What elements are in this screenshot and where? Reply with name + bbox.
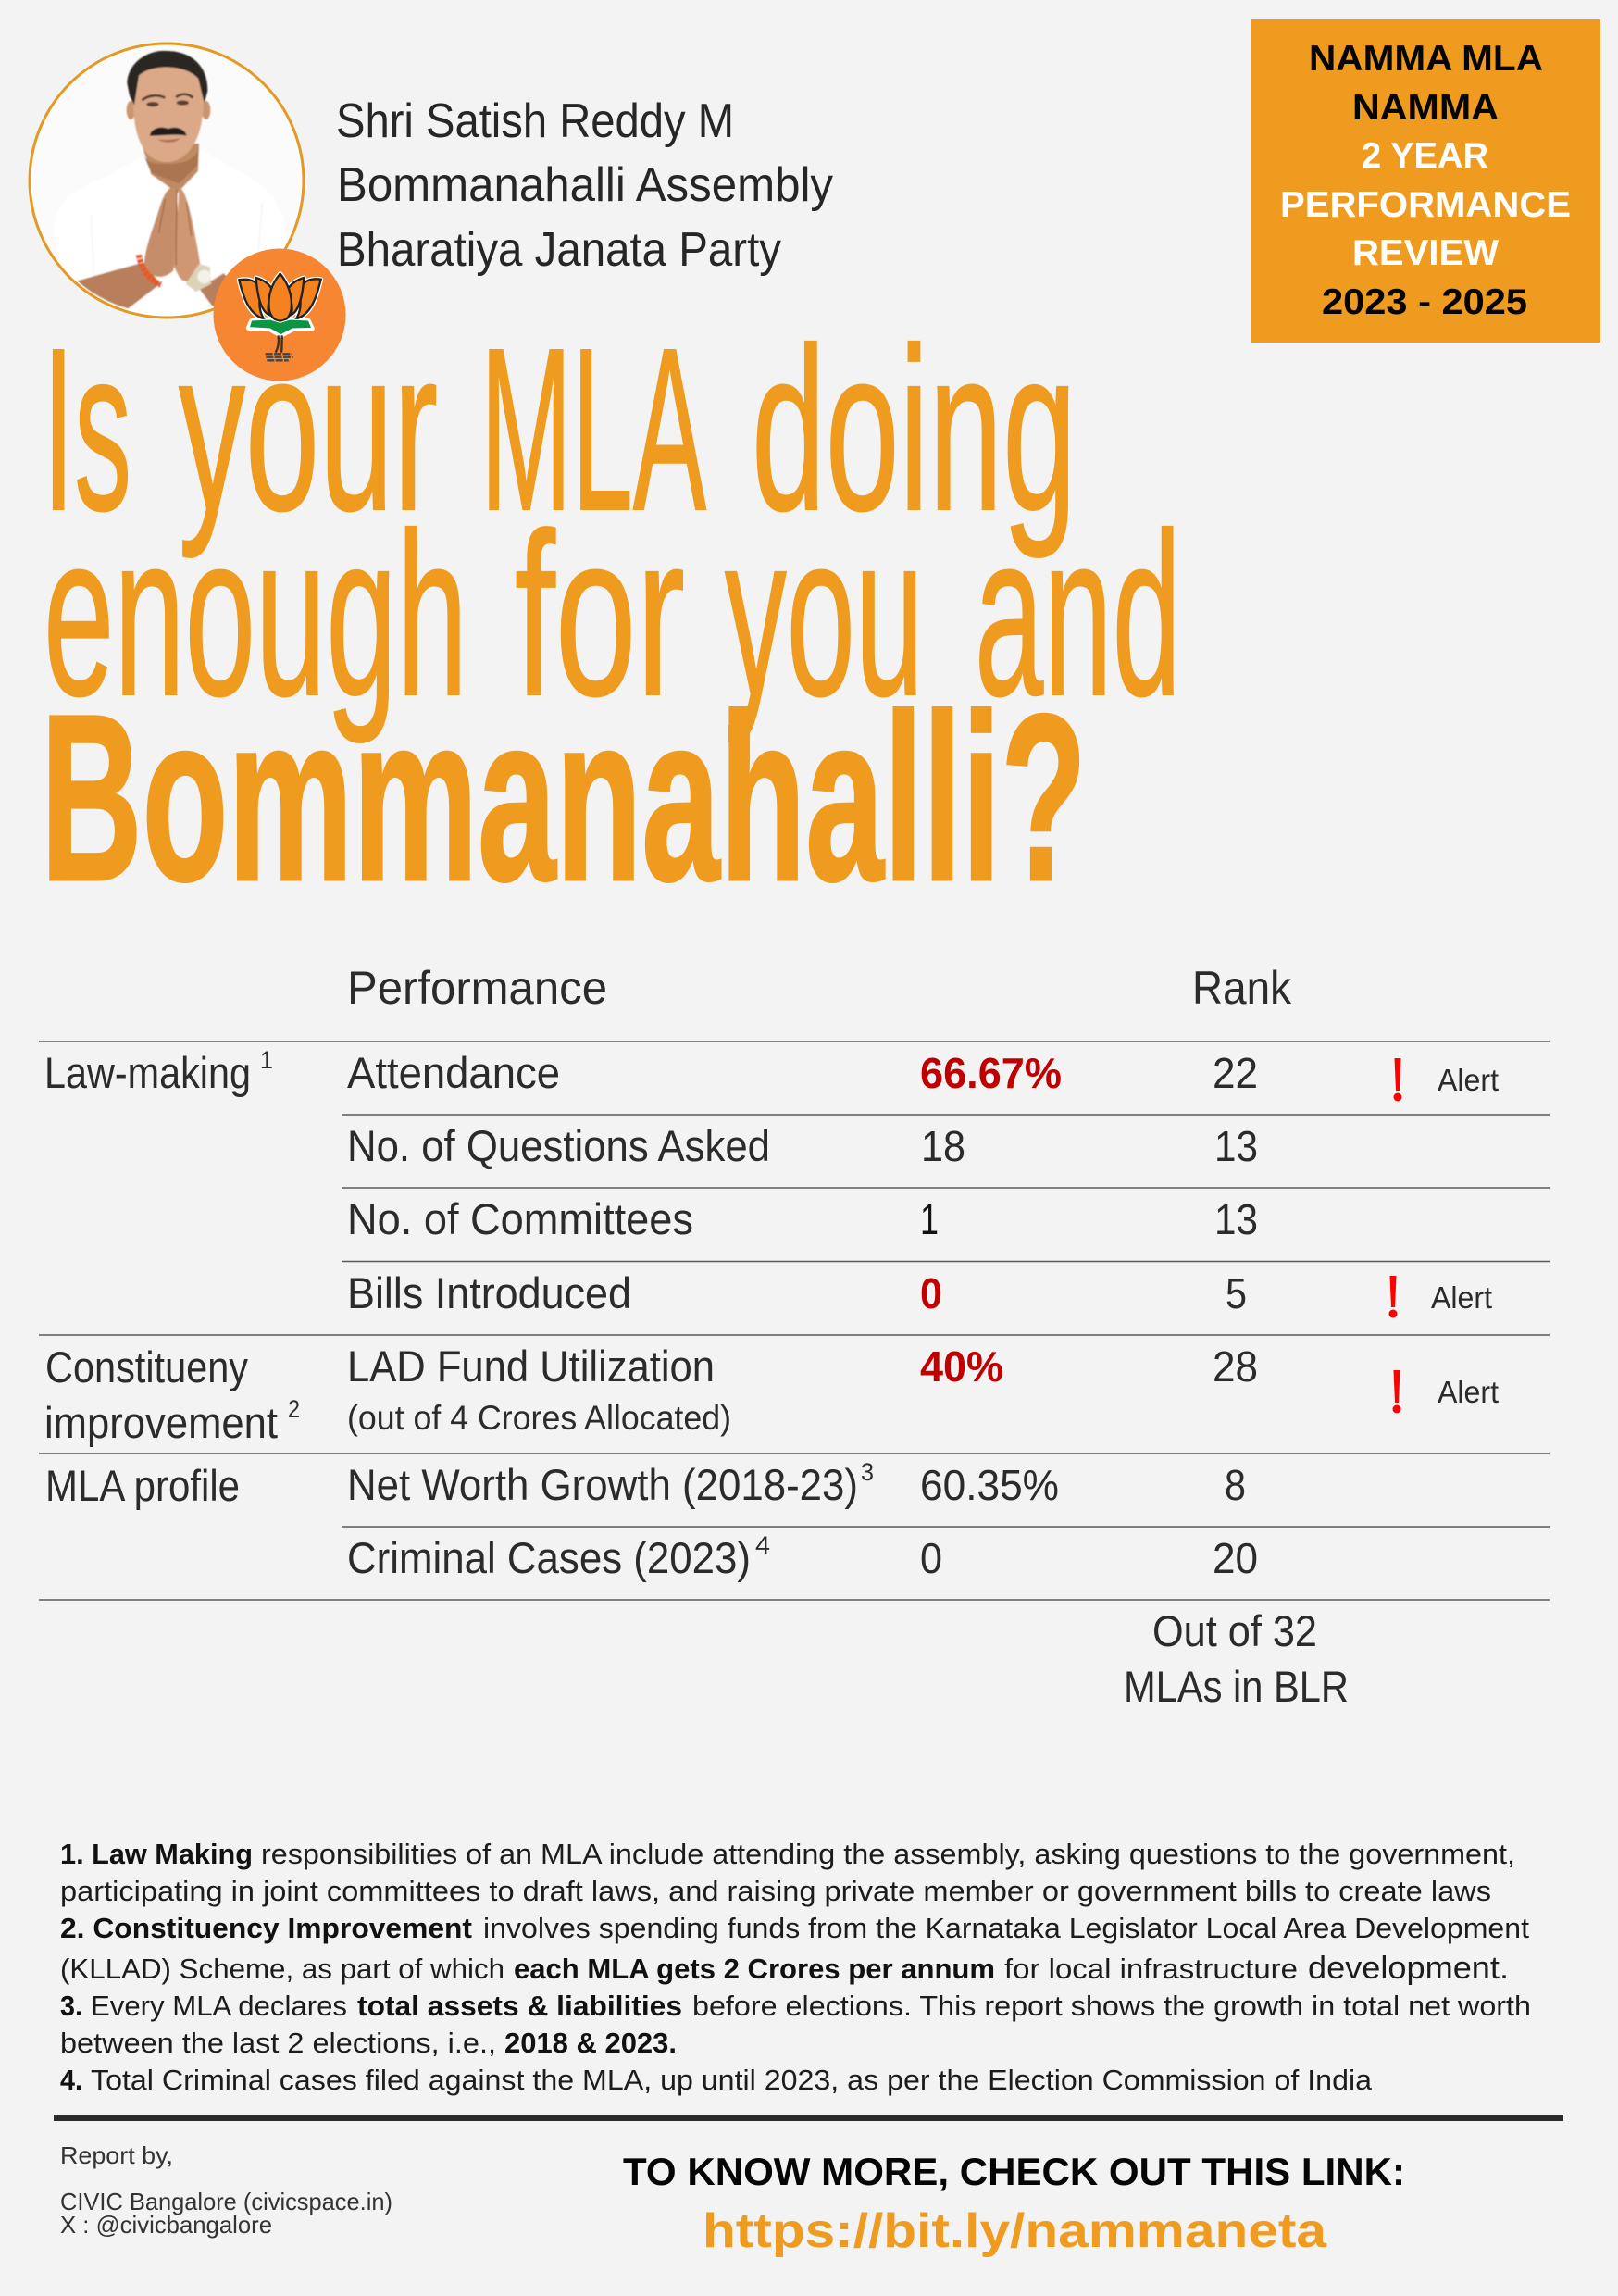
note 2: development.: [1308, 1951, 1509, 1986]
note 2: for local infrastructure: [1004, 1953, 1298, 1985]
row: committees: 13: [1214, 1195, 1258, 1243]
review badge: 2 YEAR: [1362, 136, 1488, 176]
performance table: [39, 962, 1550, 1711]
headline: for: [515, 485, 685, 743]
row: LAD fund: LAD Fund Utilization: [347, 1341, 715, 1391]
row: questions asked: No. of Questions Asked: [347, 1121, 770, 1170]
row: attendance: 22: [1213, 1049, 1258, 1097]
row: questions asked: 13: [1214, 1122, 1258, 1170]
headline: your: [179, 300, 438, 558]
row: net worth growth: Net Worth Growth (2018-23): [347, 1460, 858, 1509]
row: bills introduced: 0: [920, 1269, 942, 1317]
row: criminal cases: 0: [920, 1534, 942, 1582]
row: LAD fund: 40%: [920, 1342, 1003, 1391]
note 2: each MLA gets 2 Crores per annum: [514, 1953, 995, 1985]
row: committees: 1: [920, 1195, 939, 1243]
review badge: 2023 - 2025: [1322, 282, 1527, 322]
note 1: [60, 1838, 1515, 1907]
review badge: NAMMA MLA: [1309, 39, 1543, 79]
note 3: total assets & liabilities: [357, 1990, 682, 2022]
report credit: [60, 2141, 392, 2239]
rank footnote: [1124, 1606, 1349, 1711]
row: bills introduced: Bills Introduced: [347, 1268, 631, 1317]
note 2: 2. Constituency Improvement: [60, 1912, 472, 1944]
rank footnote: Out of 32: [1152, 1606, 1317, 1655]
row: committees: [347, 1194, 1258, 1243]
review badge: REVIEW: [1352, 233, 1499, 273]
headline: Is: [43, 300, 131, 558]
row: questions asked: 18: [921, 1122, 965, 1170]
headline: you: [725, 485, 924, 743]
category: constituency improvement: [44, 1342, 300, 1447]
row: attendance: 66.67%: [920, 1049, 1062, 1097]
row: LAD fund: 28: [1213, 1342, 1258, 1391]
call to action: TO KNOW MORE, CHECK OUT THIS LINK:: [623, 2150, 1405, 2193]
row: bills introduced: 5: [1226, 1269, 1247, 1317]
alert: bills: Alert: [1431, 1280, 1492, 1315]
note 1: 1. Law Making: [60, 1838, 253, 1870]
row: criminal cases: 20: [1213, 1534, 1258, 1582]
note 3: [60, 1990, 1531, 2059]
headline: doing: [752, 300, 1077, 558]
row: criminal cases: 4: [755, 1531, 770, 1559]
note 2: involves spending funds from the Karnataka Legislator Local Area Development: [483, 1912, 1529, 1944]
category: constituency improvement: 2: [288, 1395, 300, 1423]
alert: attendance: Alert: [1438, 1063, 1499, 1097]
report credit: X : @civicbangalore: [60, 2211, 272, 2239]
category: law-making: 1: [260, 1046, 273, 1074]
column heading: performance: Performance: [347, 962, 607, 1014]
alert: LAD fund: Alert: [1438, 1375, 1499, 1409]
note 3: 3.: [60, 1990, 82, 2022]
alert: bills: [1388, 1276, 1492, 1318]
portrait photo of the MLA: [30, 44, 304, 319]
row: attendance: Attendance: [347, 1048, 560, 1097]
note 3: 2018 & 2023.: [504, 2027, 677, 2059]
row: criminal cases: [347, 1531, 1258, 1582]
note 4: 4.: [60, 2064, 82, 2096]
column heading: rank: Rank: [1192, 962, 1292, 1014]
row: LAD fund: [347, 1341, 1258, 1437]
review badge: PERFORMANCE: [1280, 185, 1571, 225]
constituency: Bommanahalli Assembly: [337, 158, 833, 212]
note 3: between the last 2 elections, i.e.,: [60, 2027, 496, 2059]
MLA name: Shri Satish Reddy M: [336, 94, 734, 148]
row: questions asked: [347, 1121, 1258, 1170]
note 2: (KLLAD) Scheme, as part of which: [60, 1953, 504, 1985]
alert: attendance: [1394, 1058, 1499, 1102]
report credit: Report by,: [60, 2141, 173, 2169]
divider: [54, 2115, 1563, 2121]
row: net worth growth: 8: [1225, 1461, 1246, 1509]
headline: enough: [44, 485, 467, 743]
category: law-making: Law-making: [44, 1048, 251, 1097]
review badge: NAMMA: [1352, 88, 1499, 128]
row: committees: No. of Committees: [347, 1194, 693, 1243]
category: MLA profile: MLA profile: [45, 1461, 240, 1510]
party logo badge: lotus: [213, 248, 346, 381]
headline: and: [975, 485, 1181, 743]
MLA details: [336, 94, 833, 277]
row: bills introduced: [347, 1268, 1247, 1317]
headline: [41, 300, 1181, 930]
note 4: Total Criminal cases filed against the MLA, up until 2023, as per the Election Commission of India: [91, 2064, 1373, 2096]
note 1: responsibilities of an MLA include attending the assembly, asking questions to the government,: [261, 1838, 1515, 1870]
report credit: CIVIC Bangalore (civicspace.in): [60, 2188, 392, 2215]
category: constituency improvement: Constitueny: [45, 1342, 248, 1391]
alert: LAD fund: [1392, 1370, 1499, 1413]
rank footnote: MLAs in BLR: [1124, 1662, 1349, 1711]
note 3: before elections. This report shows the growth in total net worth: [692, 1990, 1531, 2022]
note 3: Every MLA declares: [91, 1990, 347, 2022]
note 1: participating in joint committees to draft laws, and raising private member or government bills to create laws: [60, 1875, 1491, 1907]
row: net worth growth: 3: [861, 1458, 874, 1486]
review badge: [1251, 19, 1600, 343]
row: LAD fund: (out of 4 Crores Allocated): [347, 1399, 731, 1437]
row: net worth growth: [347, 1458, 1246, 1509]
note 2: [60, 1912, 1529, 1986]
category: constituency improvement: improvement: [44, 1398, 278, 1447]
row: criminal cases: Criminal Cases (2023): [347, 1533, 751, 1582]
link: https://bit.ly/nammaneta: [703, 2204, 1327, 2258]
party: Bharatiya Janata Party: [337, 223, 781, 277]
row: net worth growth: 60.35%: [920, 1461, 1059, 1509]
headline: MLA: [480, 300, 706, 558]
call to action: [623, 2150, 1405, 2258]
footnotes: [60, 1838, 1531, 2096]
row: attendance: [347, 1048, 1258, 1097]
